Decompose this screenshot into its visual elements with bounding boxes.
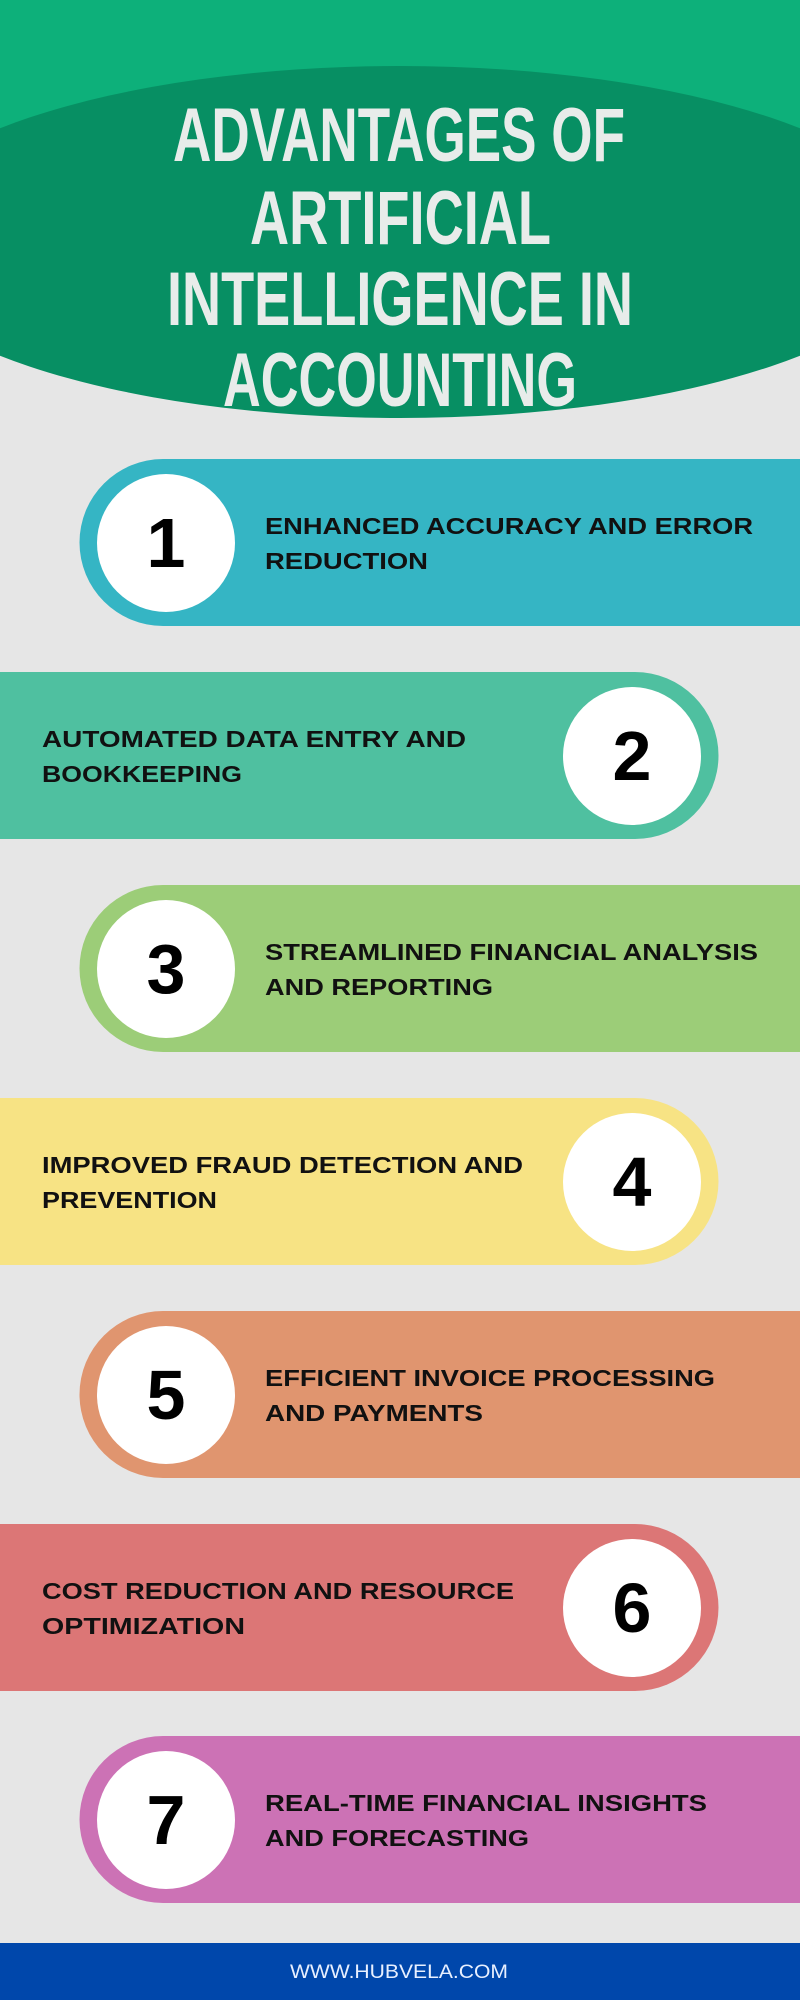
item 2 [0,672,718,839]
item 7: REAL-TIME FINANCIAL INSIGHTS [265,1790,707,1816]
item 2: AUTOMATED DATA ENTRY AND [42,726,466,752]
item 1 [80,459,800,626]
item 5: AND PAYMENTS [265,1400,483,1426]
header background [0,0,800,418]
item 2: BOOKKEEPING [42,761,242,787]
item 6 [0,1524,718,1691]
footer: WWW.HUBVELA.COM [290,1962,508,1983]
item 3 [80,885,800,1052]
item 3: 3 [147,930,185,1008]
item 1: REDUCTION [265,548,428,574]
item 1: 1 [147,504,185,582]
item 3: STREAMLINED FINANCIAL ANALYSIS [265,939,758,965]
title: ACCOUNTING [223,338,577,423]
footer [0,1943,800,2000]
item 4: PREVENTION [42,1187,217,1213]
item 3: AND REPORTING [265,974,493,1000]
item 5: EFFICIENT INVOICE PROCESSING [265,1365,715,1391]
item 2: 2 [613,717,651,795]
item 5: 5 [147,1356,185,1434]
item 6: 6 [613,1569,651,1647]
item 4 [0,1098,718,1265]
title: ARTIFICIAL [250,176,551,261]
item 7: AND FORECASTING [265,1825,529,1851]
item 5 [80,1311,800,1478]
item 1: ENHANCED ACCURACY AND ERROR [265,513,753,539]
item 4: IMPROVED FRAUD DETECTION AND [42,1152,523,1178]
item 6: COST REDUCTION AND RESOURCE [42,1578,514,1604]
item 7 [80,1736,800,1903]
title [167,93,633,423]
item 6: OPTIMIZATION [42,1613,245,1639]
item 7: 7 [147,1781,185,1859]
item 4: 4 [613,1143,652,1221]
